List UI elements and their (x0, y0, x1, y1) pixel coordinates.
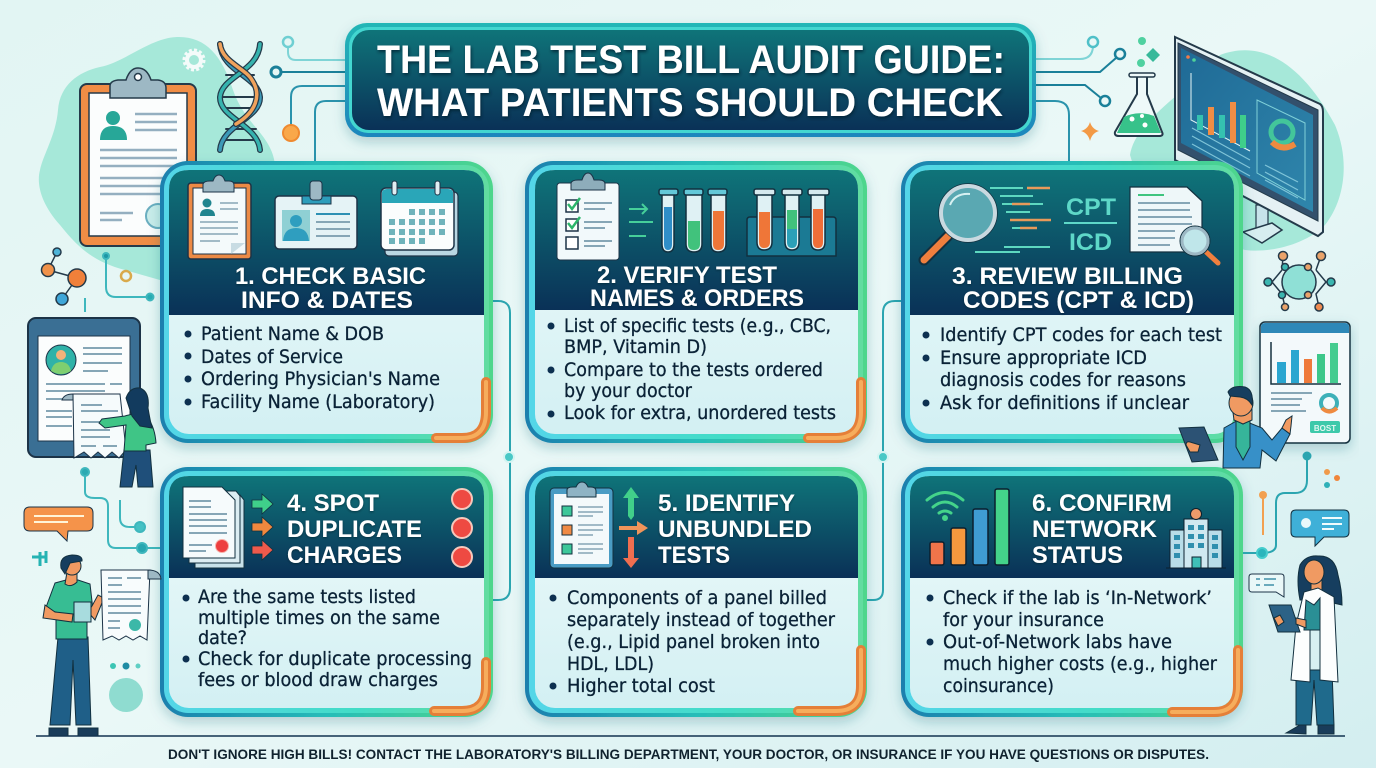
figure: doctor with tablet (1269, 556, 1342, 734)
icon: duplicate documents (183, 487, 244, 568)
text block (926, 587, 1217, 697)
heading: TESTS (658, 542, 730, 569)
text block: Out-of-Network labs have (943, 631, 1172, 653)
icon: magnifier (924, 184, 997, 260)
circuit lines: left lower (81, 253, 160, 553)
title text: WHAT PATIENTS SHOULD CHECK (377, 81, 1003, 125)
blob: top right mint (1130, 50, 1344, 251)
text block: diagnosis codes for reasons (940, 369, 1186, 391)
heading: UNBUNDLED (658, 516, 812, 543)
text block: date? (198, 627, 247, 649)
text block: Are the same tests listed (198, 586, 416, 608)
circuit lines: right lower (1243, 452, 1310, 558)
heading: INFO & DATES (241, 287, 413, 314)
figure: woman reviewing bill (99, 388, 156, 487)
text block: separately instead of together (567, 609, 835, 631)
icon: orange pin (1259, 491, 1267, 535)
title banner (345, 23, 1036, 137)
panel: 1 check basic info and dates (160, 161, 493, 443)
heading: NAMES & ORDERS (590, 285, 804, 312)
orange corner (1172, 650, 1238, 712)
heading: 1. CHECK BASIC (235, 263, 426, 290)
text block: HDL, LDL) (567, 653, 654, 675)
panel: 2 verify test names and orders (525, 161, 867, 443)
text block: List of specific tests (e.g., CBC, (564, 315, 831, 337)
title text (377, 38, 1005, 125)
circuit lines: title right (1036, 37, 1125, 161)
text block: Components of a panel billed (567, 587, 827, 609)
text block: Dates of Service (201, 346, 343, 368)
figure: man presenting with tablet (1179, 387, 1292, 468)
footer note: DON'T IGNORE HIGH BILLS! CONTACT THE LABORATORY'S BILLING DEPARTMENT, YOUR DOCTOR, OR INSURANCE IF YOU HAVE QUESTIONS OR DISPUTES. (168, 747, 1209, 762)
icon: tablet with patient profile (28, 318, 140, 457)
icon: wifi signal (927, 492, 963, 520)
icon: calendar (381, 181, 458, 256)
icon: computer monitor (1175, 37, 1323, 243)
orange corner (434, 662, 486, 711)
icon: id badge (275, 181, 357, 249)
icon: colored arrows (252, 494, 273, 560)
title text: THE LAB TEST BILL AUDIT GUIDE: (377, 38, 1005, 82)
icon: receipt held by man (101, 570, 161, 640)
text block: Patient Name & DOB (201, 323, 384, 345)
panel: 4 spot duplicate charges (160, 467, 493, 717)
icon: red alert dots (452, 489, 472, 567)
heading (952, 263, 1194, 314)
heading: 6. CONFIRM (1032, 490, 1172, 517)
icon: left molecule (42, 248, 86, 305)
ground line (36, 735, 1345, 737)
icon: split arrows (619, 487, 648, 568)
icon: orange code lines (1010, 188, 1051, 228)
icon: CPT and ICD labels: ICD (1069, 229, 1112, 256)
text block: coinsurance) (943, 675, 1054, 697)
icon: checklist (557, 173, 619, 260)
icon: sparkles (1081, 37, 1160, 141)
heading: 3. REVIEW BILLING (952, 263, 1183, 290)
icon: tube rack (747, 189, 836, 256)
panel: 5 identify unbundled tests (525, 467, 867, 717)
heading: NETWORK (1032, 516, 1158, 543)
icon: big clipboard (80, 68, 196, 246)
icon: blue speech bubble (1291, 510, 1349, 546)
text block: BMP, Vitamin D) (564, 336, 707, 358)
panel: 3 review billing codes (901, 161, 1243, 443)
text block: fees or blood draw charges (198, 669, 438, 691)
text block: Facility Name (Laboratory) (201, 391, 435, 413)
heading (287, 490, 422, 569)
icon: dashboard card (1260, 322, 1350, 443)
icon: clipboard checklist (550, 482, 613, 568)
connector: cards left (492, 301, 514, 600)
orange corner (808, 382, 861, 438)
text block: Check for duplicate processing (198, 648, 472, 670)
text block: Check if the lab is ‘In-Network’ (943, 587, 1212, 609)
heading (235, 263, 426, 314)
heading: CHARGES (287, 542, 402, 569)
text block: Ask for definitions if unclear (940, 392, 1189, 414)
icon: arrows (629, 204, 653, 236)
icon: orange node (283, 125, 299, 141)
text block: by your doctor (564, 380, 692, 402)
heading: DUPLICATE (287, 516, 422, 543)
icon: clipboard (188, 175, 251, 259)
text block (184, 323, 440, 413)
icon: three small dots (1324, 469, 1340, 488)
icon: right molecule (1264, 252, 1335, 311)
icon: orange speech bubble (24, 507, 93, 541)
icon: code lines (970, 188, 1050, 252)
heading (1032, 490, 1172, 569)
text block: Look for extra, unordered tests (564, 402, 836, 424)
text block: multiple times on the same (198, 607, 440, 629)
icon: long receipt (62, 394, 126, 458)
heading: 5. IDENTIFY (658, 490, 795, 517)
icon: CPT and ICD labels: CPT (1066, 194, 1116, 221)
blob: top left mint (39, 37, 275, 300)
text block (548, 315, 836, 424)
text block: (e.g., Lipid panel broken into (567, 631, 820, 653)
text block: for your insurance (943, 609, 1104, 631)
icon: dots and round badge (109, 662, 143, 712)
heading (658, 490, 812, 569)
icon: document with magnifier (1130, 187, 1218, 263)
text block: Compare to the tests ordered (564, 359, 823, 381)
panel: 6 confirm network status (901, 467, 1243, 717)
icon: dashboard card: BOST (1314, 424, 1336, 433)
heading (590, 262, 804, 312)
text block (182, 586, 472, 691)
icon: hospital building (1166, 508, 1226, 568)
bar chart: signal bars (930, 489, 1009, 565)
text block: Ensure appropriate ICD (940, 347, 1147, 369)
icon: DNA helix (220, 44, 260, 150)
text block: Ordering Physician's Name (201, 368, 440, 390)
orange corner (436, 382, 486, 438)
icon: test tubes (659, 189, 727, 252)
connector: cards right (867, 301, 901, 600)
figure: man holding receipt (43, 555, 104, 736)
text block (550, 587, 835, 697)
icon: settings gear (184, 50, 204, 70)
orange corner (798, 650, 861, 711)
icon: lab flask (1115, 73, 1163, 136)
text block: much higher costs (e.g., higher (943, 653, 1217, 675)
icon: CPT and ICD labels (1064, 194, 1117, 256)
circuit lines: title left (271, 37, 345, 161)
icon: small outline bubble (1249, 574, 1284, 597)
heading: 4. SPOT (287, 490, 379, 517)
heading: STATUS (1032, 542, 1123, 569)
icon: small circuit glyph (32, 551, 46, 566)
text block (922, 324, 1222, 414)
heading: CODES (CPT & ICD) (963, 287, 1194, 314)
text block: Identify CPT codes for each test (940, 324, 1222, 346)
text block: Higher total cost (567, 675, 715, 697)
heading: 2. VERIFY TEST (597, 262, 777, 289)
